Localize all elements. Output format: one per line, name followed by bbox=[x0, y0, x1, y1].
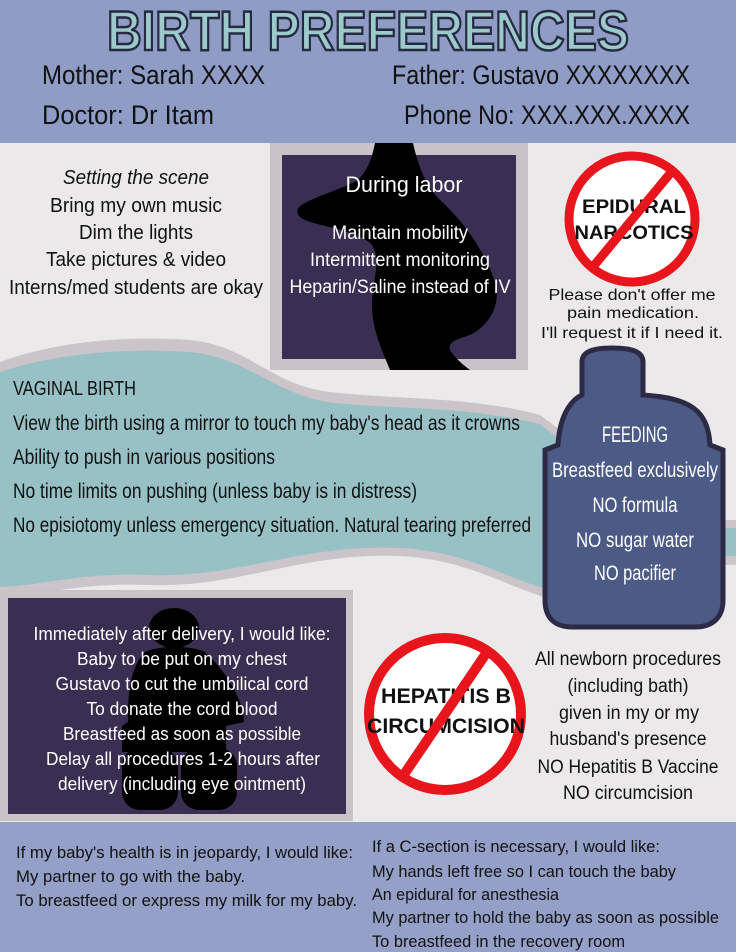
list: c-section bbox=[372, 837, 719, 951]
heading: during labor: During labor bbox=[346, 172, 462, 197]
list: after delivery: Breastfeed as soon as possible bbox=[63, 724, 301, 744]
text: setting the scene: Bring my own music bbox=[50, 195, 222, 217]
list: newborn procedures: (including bath) bbox=[568, 676, 688, 697]
list: after delivery: To donate the cord blood bbox=[86, 699, 278, 719]
list: newborn procedures bbox=[535, 649, 721, 804]
caption: pain medication: Please don't offer me bbox=[548, 287, 716, 304]
list: labor: Heparin/Saline instead of IV bbox=[290, 277, 511, 298]
bottom band bbox=[0, 822, 736, 952]
list: labor bbox=[290, 223, 511, 298]
icon: no epidural bbox=[569, 156, 695, 282]
heading: feeding: FEEDING bbox=[602, 422, 668, 447]
caption: pain medication: I'll request it if I need it. bbox=[541, 325, 723, 342]
teal band: vaginal birth bbox=[0, 339, 736, 606]
icon: no hepatitis b bbox=[367, 638, 525, 790]
list: baby in jeopardy bbox=[16, 843, 357, 910]
icon: pregnant silhouette bbox=[297, 143, 497, 370]
info: phone: Phone No: XXX.XXX.XXXX bbox=[404, 100, 690, 130]
list: c-section: To breastfeed in the recovery room bbox=[372, 932, 625, 951]
list: vaginal birth: Ability to push in various positions bbox=[13, 446, 275, 469]
info: father: Father: Gustavo XXXXXXXX bbox=[392, 60, 690, 90]
list: feeding: NO formula bbox=[592, 494, 678, 517]
list: feeding: NO pacifier bbox=[594, 562, 676, 585]
list: after delivery bbox=[34, 624, 330, 794]
list: vaginal birth bbox=[13, 412, 531, 537]
panel: after delivery bbox=[0, 590, 353, 821]
list: after delivery: Delay all procedures 1-2 hours after bbox=[46, 749, 320, 769]
list: after delivery: Immediately after delivery, I would like: bbox=[34, 624, 330, 644]
icon: no hepatitis b: HEPATITIS B bbox=[381, 685, 511, 708]
text: setting the scene: Interns/med students are okay bbox=[9, 277, 263, 299]
list: baby in jeopardy: To breastfeed or express my milk for my baby. bbox=[16, 891, 357, 910]
list: newborn procedures: husband's presence bbox=[550, 729, 706, 750]
info: doctor: Doctor: Dr Itam bbox=[42, 100, 214, 130]
icon: no epidural: NARCOTICS bbox=[574, 223, 694, 244]
list: vaginal birth: View the birth using a mirror to touch my baby's head as it crowns bbox=[13, 412, 520, 435]
list: newborn procedures: NO circumcision bbox=[563, 783, 693, 804]
list: newborn procedures: NO Hepatitis B Vaccine bbox=[538, 757, 718, 778]
list: labor: Intermittent monitoring bbox=[310, 250, 490, 271]
icon: no epidural: EPIDURAL bbox=[582, 197, 686, 218]
list: c-section: My hands left free so I can touch the baby bbox=[372, 862, 676, 881]
list: c-section: My partner to hold the baby as soon as possible bbox=[372, 908, 719, 927]
panel: during labor bbox=[270, 143, 528, 370]
list: feeding bbox=[552, 459, 718, 585]
list: baby in jeopardy: My partner to go with the baby. bbox=[16, 867, 245, 886]
list: c-section: An epidural for anesthesia bbox=[372, 885, 560, 904]
caption: pain medication bbox=[541, 287, 723, 342]
text: setting the scene: Dim the lights bbox=[79, 222, 193, 244]
text: setting the scene: Setting the scene bbox=[63, 167, 209, 189]
heading: vaginal birth: VAGINAL BIRTH bbox=[13, 378, 136, 400]
header band bbox=[0, 0, 736, 143]
list: baby in jeopardy: If my baby's health is in jeopardy, I would like: bbox=[16, 843, 353, 862]
list: after delivery: delivery (including eye ointment) bbox=[58, 774, 306, 794]
list: newborn procedures: given in my or my bbox=[559, 703, 699, 724]
list: c-section: If a C-section is necessary, I would like: bbox=[372, 837, 660, 856]
list: feeding: NO sugar water bbox=[576, 529, 694, 552]
caption: pain medication: pain medication. bbox=[567, 305, 699, 322]
text: setting the scene bbox=[9, 167, 263, 299]
icon: bottle feeding bbox=[545, 348, 723, 627]
list: labor: Maintain mobility bbox=[332, 223, 468, 244]
text: setting the scene: Take pictures & video bbox=[46, 249, 226, 271]
list: after delivery: Gustavo to cut the umbilical cord bbox=[56, 674, 308, 694]
list: vaginal birth: No episiotomy unless emergency situation. Natural tearing preferred bbox=[13, 514, 531, 537]
icon: baby silhouette bbox=[122, 608, 244, 810]
info: mother: Mother: Sarah XXXX bbox=[42, 60, 265, 90]
list: after delivery: Baby to be put on my chest bbox=[77, 649, 287, 669]
title: BIRTH PREFERENCES bbox=[107, 0, 629, 62]
list: newborn procedures: All newborn procedures bbox=[535, 649, 721, 670]
list: vaginal birth: No time limits on pushing (unless baby is in distress) bbox=[13, 480, 417, 503]
icon: no hepatitis b: CIRCUMCISION bbox=[367, 715, 525, 738]
